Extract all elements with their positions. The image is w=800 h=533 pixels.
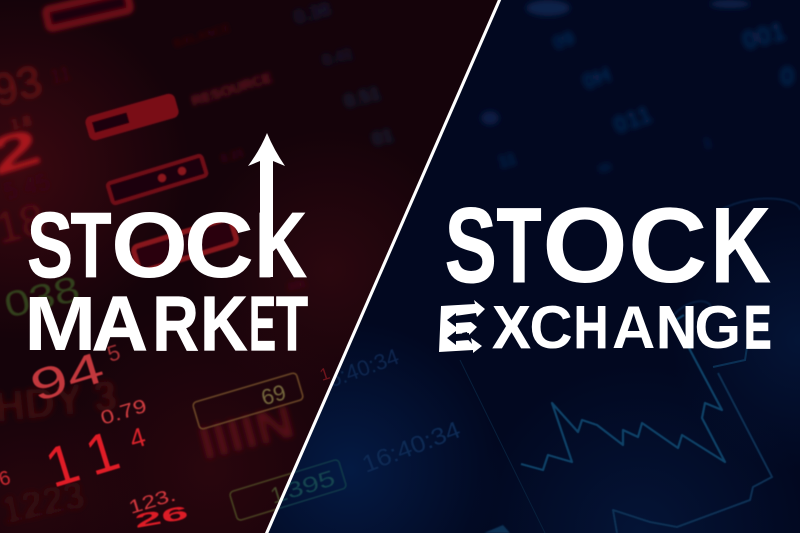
figure 123: 123. xyxy=(126,485,178,518)
blurred figure 18: 5 45 xyxy=(1,168,53,206)
word: XCHANGE: G xyxy=(694,294,741,361)
word: XCHANGE: H xyxy=(574,294,608,361)
blurred blue figures: 001 xyxy=(739,16,788,56)
word: XCHANGE: E xyxy=(744,294,771,361)
word: STOCK left: T xyxy=(70,193,112,297)
word: STOCK left: S xyxy=(27,193,73,297)
ticker box 1395 left part xyxy=(228,472,292,522)
word: STOCK left: K xyxy=(255,193,307,297)
chart swoosh behind title xyxy=(670,198,800,322)
blurred blue figures: 11 xyxy=(496,149,518,172)
faint lower spike xyxy=(484,525,510,533)
blurred blue figures: 1 xyxy=(702,135,713,151)
panel: stock market background xyxy=(0,0,500,533)
line chart: secondary trace xyxy=(713,347,747,367)
divider line xyxy=(265,0,501,533)
word: STOCK left: O xyxy=(111,193,188,297)
blurred figure 18 xyxy=(0,114,46,244)
ticker box behind title xyxy=(130,222,240,268)
blurred text band: AN xyxy=(285,276,307,295)
figure 0.79: 0.79 xyxy=(98,396,149,430)
blurred figures: upper left: BALANCE xyxy=(172,20,232,51)
blurred figures: upper left: 0.23 xyxy=(219,146,246,166)
faint blue figures at top: 0.41 xyxy=(321,45,355,70)
faint blue figures at top: 01 xyxy=(370,125,396,151)
figure 114 xyxy=(48,427,146,488)
blurred figures: upper left xyxy=(0,20,274,166)
ticker box 1395 right part xyxy=(278,459,347,510)
word: XCHANGE: X xyxy=(492,294,530,361)
blurred blue figures xyxy=(496,16,794,176)
ticker box 1395 left part: 1 xyxy=(268,481,287,509)
line chart: price trace xyxy=(521,315,725,470)
timestamp lower: 16:40:34 xyxy=(358,416,464,479)
word: STOCK right: C xyxy=(628,185,708,305)
blurred blue figures: 011 xyxy=(610,101,655,140)
blurred text band xyxy=(0,276,307,533)
word: XCHANGE: C xyxy=(529,294,573,361)
ticker box: lower xyxy=(107,155,207,204)
word: MARKET: K xyxy=(200,281,247,367)
word: MARKET: A xyxy=(92,281,148,367)
word: STOCK right: S xyxy=(445,185,497,305)
word: MARKET: R xyxy=(153,281,199,367)
faint number near divider: 1 xyxy=(317,364,332,385)
word: STOCK left: C xyxy=(184,193,254,297)
word: MARKET: E xyxy=(249,281,276,367)
faint blue figures at top: 0.51 xyxy=(342,83,383,113)
ticker box: top xyxy=(45,0,131,29)
word: STOCK right: T xyxy=(496,185,542,305)
blurred figures: upper left: RESOURCE xyxy=(189,69,274,109)
blurred blobs at top xyxy=(481,0,750,125)
blurred text band: IIIIN xyxy=(193,395,299,470)
word: MARKET: M xyxy=(24,281,96,367)
figure 114: 1 xyxy=(38,430,86,499)
ticker box 69 xyxy=(192,372,304,430)
panel: stock exchange background xyxy=(229,0,800,533)
figure 945 xyxy=(32,344,120,400)
heading: stock exchange xyxy=(439,185,771,361)
figure 945: 94 xyxy=(25,343,110,412)
blurred blue figures: 00 xyxy=(598,161,613,176)
line chart: lower trace xyxy=(613,373,772,533)
icon: E made of arrows xyxy=(439,300,485,353)
word: XCHANGE: A xyxy=(612,294,655,361)
blurred blue figures: 0 xyxy=(780,61,794,91)
blurred blue figures: 0H xyxy=(579,62,614,95)
icon: up arrow from K xyxy=(248,133,285,277)
green figure: 038 xyxy=(0,268,84,326)
faint blue figures at top xyxy=(292,0,396,151)
figure 114: 4 xyxy=(126,422,149,455)
ticker box 69: 69 xyxy=(258,380,289,410)
figure 26: 26 xyxy=(133,503,190,533)
timestamp upper: 16:40:34 xyxy=(313,344,402,397)
word: STOCK right: K xyxy=(711,185,770,305)
word: STOCK right: O xyxy=(542,185,628,305)
faint diagonal xyxy=(460,360,545,533)
word: MARKET: T xyxy=(276,281,308,367)
blurred figures: upper left: 11 xyxy=(48,62,73,89)
figure 114: 1 xyxy=(78,418,126,487)
blurred blue figures: 09 xyxy=(551,28,578,55)
word: XCHANGE: N xyxy=(656,294,697,361)
figure 945: 5 xyxy=(104,339,123,367)
heading: stock market xyxy=(24,133,308,367)
ticker box: upper xyxy=(87,95,177,139)
ticker box 1395 right part: 1395 xyxy=(268,465,338,509)
blurred figure 18: 1.8 xyxy=(9,112,33,134)
